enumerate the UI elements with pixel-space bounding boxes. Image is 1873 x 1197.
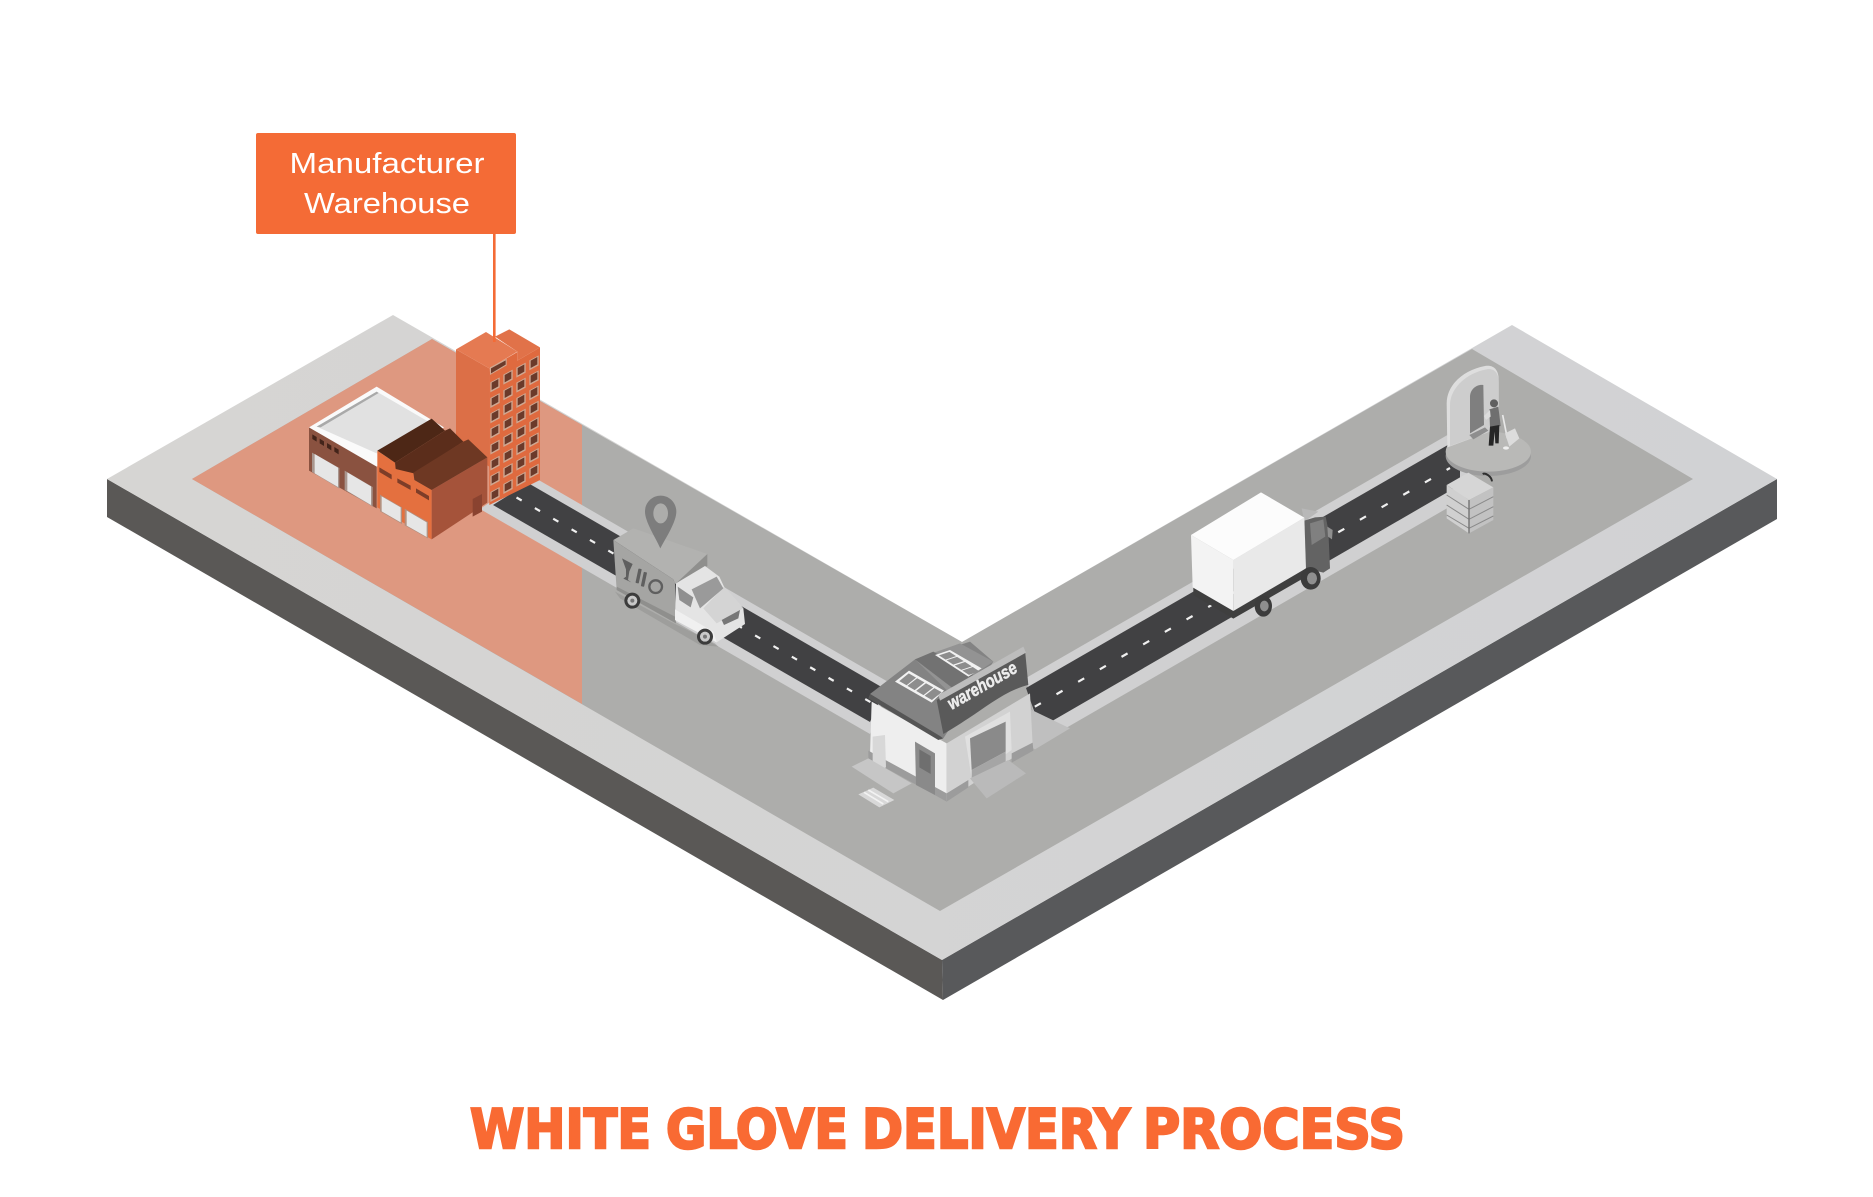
icon: delivery van with location pin (613, 496, 745, 647)
title: DELIVERY (862, 1098, 1131, 1161)
tower block (456, 329, 540, 505)
round platform (1446, 432, 1531, 476)
wall base strip (868, 751, 947, 802)
icon: semi truck with white box (1191, 492, 1333, 619)
rear low building (309, 387, 444, 508)
icon: customer doorway and stacked pallet (1446, 366, 1531, 533)
warehouse right wall (947, 693, 1033, 801)
platform top rim (107, 315, 1777, 960)
loading bay door and ramp (965, 712, 1026, 798)
fragile icons on van (622, 558, 662, 593)
title (470, 1098, 1405, 1161)
pallet (858, 788, 894, 807)
van cargo box (613, 528, 707, 623)
van wheels (624, 593, 713, 645)
door (915, 742, 935, 795)
warehouse sign board (937, 647, 1028, 734)
road: warehouse to customer (1026, 422, 1470, 743)
callout: Manufacturer Warehouse: Warehouse (304, 188, 470, 220)
warehouse left wall (870, 702, 947, 800)
warehouse sign board: warehouse (944, 657, 1021, 713)
highlighted manufacturer zone (192, 339, 582, 704)
callout: Manufacturer Warehouse: Manufacturer (290, 148, 485, 180)
skylights (895, 650, 982, 703)
stacked pallet (1447, 473, 1493, 533)
van shadow (615, 592, 718, 647)
delivery person (1484, 399, 1501, 446)
platform left side wall (107, 479, 943, 1000)
arched door (1470, 385, 1484, 433)
leader line (493, 234, 496, 342)
arched wall (1447, 366, 1499, 447)
platform inner ground (192, 339, 1693, 911)
hand truck and box (1503, 415, 1519, 450)
location pin (645, 496, 676, 548)
side loading slab (1025, 708, 1070, 749)
doormat (1469, 427, 1488, 439)
title: GLOVE (666, 1098, 848, 1161)
road: manufacturer to warehouse (480, 475, 890, 734)
roof (868, 642, 993, 740)
front step slab (852, 758, 912, 793)
callout: Manufacturer Warehouse (256, 133, 516, 234)
title: WHITE (470, 1098, 651, 1161)
platform: L-shaped base (107, 315, 1777, 1000)
truck white cargo box (1191, 492, 1306, 611)
truck wheels (1255, 567, 1321, 617)
icon: warehouse building (852, 642, 1070, 807)
van cab (675, 566, 745, 642)
title: PROCESS (1143, 1098, 1405, 1161)
electric box (873, 735, 886, 769)
truck chassis (1193, 568, 1307, 619)
platform right side wall (942, 479, 1777, 1000)
truck cab (1302, 508, 1333, 573)
front sawtooth building (377, 419, 487, 539)
icon: manufacturer buildings (309, 329, 540, 539)
